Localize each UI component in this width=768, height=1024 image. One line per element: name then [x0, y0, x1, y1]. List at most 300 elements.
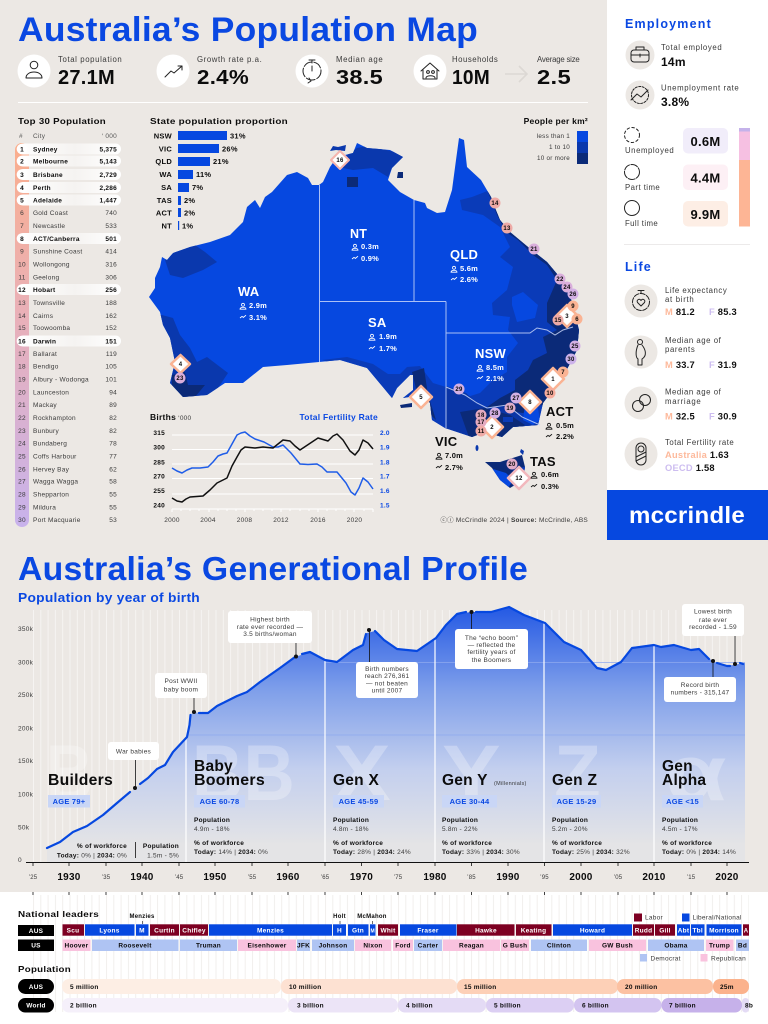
label: TAS: 0.3%: [541, 482, 559, 491]
label: NSW: NSW: [475, 346, 507, 361]
panel: national leaders: [18, 909, 749, 962]
city markers: 4: [179, 362, 183, 368]
panel: top 30 population table: 77: [109, 454, 117, 460]
panel: top 30 population table: Bendigo: [33, 364, 59, 370]
stat: life expectancy: at birth: [665, 295, 694, 304]
generation: Gen X: AGE 45-59: [339, 797, 378, 806]
bar chart: state population proportion: 2%: [184, 196, 195, 205]
callout: lowest birth rate: rate ever: [699, 617, 728, 624]
panel: top 30 population table: 17: [18, 351, 26, 358]
chart: population by year of birth: ’75: [394, 875, 403, 881]
panel: top 30 population table: 19: [18, 376, 26, 384]
line chart: births and total fertility rate: [150, 412, 390, 524]
callout: birth numbers: Birth numbers: [365, 666, 409, 673]
stat: median age of parents: parents: [665, 345, 695, 354]
stat: median age of marriage: M 32.5: [665, 412, 695, 422]
timeline: world population: 3 billion: [297, 1002, 324, 1010]
chart: population by year of birth: 1930: [57, 872, 81, 883]
generation: Gen Y: AGE 30-44: [450, 797, 490, 806]
row label: AUS: AUS: [29, 928, 44, 935]
panel: top 30 population table: ‘ 000: [102, 133, 117, 140]
panel: top 30 population table: 1,447: [99, 198, 117, 204]
city markers: 18: [477, 413, 485, 419]
panel: top 30 population table: 151: [105, 338, 117, 346]
timeline: US presidents: Obama: [664, 942, 688, 950]
panel: top 30 population table: ACT/Canberra: [33, 236, 80, 243]
chart: population by year of birth: ’65: [321, 875, 330, 881]
timeline: Australian prime ministers: Gill: [659, 928, 671, 934]
bar chart: state population proportion: TAS: [157, 196, 172, 205]
legend: Australian parties: Liberal/National: [692, 914, 742, 922]
panel: top 30 population table: 1: [20, 146, 24, 154]
stat: median age of parents: F 31.9: [709, 360, 737, 370]
timeline: world population: 8b: [745, 1002, 753, 1010]
timeline: Australian prime ministers: H: [337, 928, 342, 934]
timeline: Australian prime ministers: Lyons: [99, 928, 120, 934]
panel: top 30 population table: 89: [109, 402, 117, 409]
callout: war babies: [108, 742, 159, 790]
generation: Baby Boomers: [194, 758, 268, 856]
line chart: births and total fertility rate: 1.6: [380, 488, 390, 495]
callout: lowest birth rate: [682, 604, 744, 666]
panel: top 30 population table: 162: [105, 313, 117, 320]
timeline: world population: 7 billion: [669, 1002, 696, 1010]
axis labels: 100k: [18, 792, 34, 798]
line chart: births and total fertility rate: 2016: [310, 517, 326, 524]
city markers: 16: [336, 158, 344, 164]
stat: median age: Median age: [336, 55, 383, 64]
city markers: 30: [567, 357, 575, 363]
row label: AUS pill: [18, 979, 54, 994]
city markers: 25: [571, 344, 579, 350]
callout: record birth numbers: numbers - 315,147: [671, 690, 730, 696]
generation: Gen Z: Gen Z: [552, 772, 597, 789]
stat: median age of marriage: [624, 386, 737, 422]
panel: top 30 population table: Port Macquarie: [33, 517, 81, 524]
timeline: world population: [62, 998, 753, 1012]
bar chart: state population proportion: NT: [162, 222, 172, 230]
panel: top 30 population table: 55: [109, 492, 117, 498]
callout: war babies: War babies: [116, 748, 152, 756]
timeline: US presidents: Reagan: [459, 942, 484, 950]
callout: record birth numbers: Record birth: [681, 682, 719, 689]
panel: top 30 population table: Sydney: [33, 146, 58, 154]
title: Australia’s Population Map: [18, 11, 478, 49]
panel: top 30 population table: 14: [18, 313, 26, 320]
stat: total employed: Total employed: [661, 43, 722, 52]
chart: population by year of birth: ’85: [467, 875, 476, 881]
callout: highest birth rate: 3.5 births/woman: [243, 631, 297, 638]
panel: top 30 population table: 256: [105, 287, 117, 294]
panel: top 30 population table: Albury - Wodonga: [33, 376, 89, 384]
map: state borders: [320, 185, 573, 428]
panel: top 30 population table: 152: [105, 325, 117, 332]
panel: top 30 population table: Adelaide: [33, 198, 62, 204]
timeline: Australian population: 25m: [720, 984, 734, 991]
generation: Gen Z: Today: 25% | 2034: 32%: [552, 849, 630, 856]
stat: unemployment rate: [626, 80, 739, 110]
timeline: world population: 2 billion: [70, 1002, 97, 1010]
credit line: ⓒⓘ McCrindle 2024 | Source: McCrindle, ABS: [440, 516, 588, 524]
generation: Gen Y: % of workforce: [442, 840, 492, 847]
map: mainland: [149, 138, 579, 437]
heading: life: Life: [625, 260, 651, 274]
line chart: births and total fertility rate: 315: [153, 430, 165, 437]
chart: population by year of birth: 1950: [203, 872, 227, 883]
generation: Baby Boomers: Today: 14% | 2034: 0%: [194, 849, 268, 856]
stat: growth rate: Growth rate p.a.: [197, 55, 262, 64]
bar chart: state population proportion: 2%: [184, 208, 195, 218]
panel: top 30 population table: 12: [18, 287, 26, 294]
stat: life expectancy: M 81.2: [665, 307, 695, 317]
stat: median age of parents: M 33.7: [665, 360, 695, 370]
panel: top 30 population table: 55: [109, 504, 117, 512]
panel: top 30 population table: Wagga Wagga: [33, 478, 78, 486]
panel: top 30 population table: 105: [105, 364, 117, 370]
panel: top 30 population table: 27: [18, 478, 26, 486]
timeline: Australian prime ministers: M: [370, 928, 375, 934]
bar chart: state population proportion: VIC: [159, 144, 172, 154]
panel: top 30 population table: 15: [18, 325, 26, 332]
legend: Australian parties: Labor: [645, 914, 663, 922]
generation: Builders: AGE 79+: [53, 797, 86, 806]
panel: top 30 population table: 119: [106, 351, 117, 358]
panel: top 30 population table: 740: [105, 210, 117, 217]
timeline: Australian population: 20 million: [625, 984, 657, 991]
employment breakdown: 4.4M: [691, 170, 720, 186]
callout: echo boom: the Boomers: [472, 657, 512, 664]
heading: national leaders: National leaders: [18, 909, 99, 919]
panel: top 30 population table: 62: [109, 466, 117, 474]
panel: top 30 population table: 5,143: [99, 158, 117, 166]
axis labels: 50k: [18, 824, 30, 832]
panel: top 30 population table: 8: [20, 236, 24, 243]
panel: top 30 population table: 2,729: [99, 172, 117, 179]
stat: total fertility rate: Australia 1.63: [665, 450, 729, 460]
panel: national leaders: McMahon: [357, 914, 387, 920]
line chart: births and total fertility rate: 300: [153, 444, 165, 452]
background letters: α: [665, 728, 727, 817]
panel: top 30 population table: Melbourne: [33, 158, 68, 166]
logo panel: mccrindle: mccrindle: [629, 502, 745, 528]
panel: top 30 population table: 7: [20, 223, 24, 230]
generation: Gen Z: AGE 15-29: [557, 797, 596, 806]
stat: unemployment rate: 3.8%: [661, 95, 689, 109]
bar chart: state population proportion: SA: [161, 183, 172, 192]
generation: Gen Alpha: Today: 0% | 2034: 14%: [662, 849, 736, 856]
timeline: world population: 6 billion: [582, 1002, 609, 1010]
label: TAS: [530, 454, 559, 491]
panel: top 30 population table: 10: [18, 262, 26, 268]
panel: top 30 population table: 30: [18, 517, 26, 524]
bar chart: state population proportion: ACT: [156, 208, 172, 218]
bar chart: state population proportion: WA: [159, 170, 172, 179]
generation: Baby Boomers: 4.9m - 18%: [194, 826, 230, 833]
row label: AUS pill: AUS: [29, 984, 44, 991]
panel: life: [624, 260, 737, 473]
line chart: births and total fertility rate: 1.9: [380, 444, 390, 452]
callout: birth numbers: — not beaten: [366, 680, 408, 688]
timeline: US presidents: Clinton: [547, 942, 571, 950]
timeline: Australian population: 10 million: [289, 984, 321, 991]
city markers: 22: [556, 277, 564, 283]
timeline: US presidents: Truman: [196, 942, 221, 950]
panel: top 30 population table: Bundaberg: [33, 440, 67, 448]
city markers: 14: [491, 201, 499, 207]
stat: average size: Average size: [537, 55, 580, 64]
legend: US parties: [640, 954, 746, 962]
label: NT: [350, 227, 379, 263]
panel: top 30 population table: Gold Coast: [33, 210, 68, 217]
generation: Builders: 1.5m - 5%: [147, 852, 179, 860]
panel: top 30 population table: 101: [105, 376, 117, 384]
bar chart: state population proportion: 11%: [196, 170, 211, 179]
label: SA: 1.9m: [379, 332, 397, 341]
stat: average size: [537, 55, 580, 89]
generation: Baby Boomers: % of workforce: [194, 840, 244, 847]
generation: Builders: Population: [143, 843, 179, 850]
generation: Gen Alpha: Population: [662, 817, 698, 824]
city markers: 11: [478, 429, 485, 435]
panel: top 30 population table: #: [19, 133, 23, 140]
panel: headline stats: [18, 54, 580, 89]
timeline: US presidents: JFK: [297, 942, 310, 950]
city markers: 20: [508, 462, 516, 468]
stat: total fertility rate: Total Fertility rate: [665, 438, 734, 447]
panel: national leaders: Holt: [333, 914, 346, 920]
arrow: households to average size: [505, 66, 527, 82]
background letters: [46, 728, 727, 817]
generation: Gen Alpha: AGE <15: [666, 797, 699, 806]
generation: Builders: Today: 0% | 2034: 0%: [57, 852, 127, 860]
chart: population by year of birth: 1990: [496, 872, 520, 883]
timeline: Australian population: [62, 979, 749, 994]
timeline: Australian prime ministers: Abt: [678, 928, 690, 934]
chart: population by year of birth: ’55: [248, 875, 257, 881]
row label: US: [18, 940, 54, 951]
callout: post WWII baby boom: Post WWII: [165, 678, 197, 685]
generation: Gen Y: [442, 772, 527, 856]
stat: total population: Total population: [58, 55, 122, 64]
callout: echo boom: [455, 610, 528, 669]
chart: population by year of birth: 2000: [569, 872, 593, 883]
city markers: 28: [491, 411, 499, 417]
panel: top 30 population table: 94: [109, 390, 117, 396]
employment breakdown: 0.6M: [691, 134, 720, 149]
stat: average size: 2.5: [537, 67, 571, 89]
city markers: 15: [554, 318, 562, 324]
generation: Gen Alpha: Gen: [662, 758, 693, 775]
bar chart: state population proportion: NSW: [154, 132, 173, 140]
generation: Gen X: Today: 28% | 2034: 24%: [333, 849, 411, 856]
timeline: Australian population: 5 million: [70, 984, 99, 991]
callout: echo boom: The “echo boom”: [465, 635, 518, 642]
chart: population by year of birth: 2010: [642, 872, 666, 883]
timeline: US presidents: Bd: [738, 942, 747, 950]
city markers: 6: [575, 317, 579, 323]
timeline: Australian population: 15 million: [464, 984, 496, 991]
chart: population by year of birth: ’35: [102, 875, 111, 881]
label: SA: [368, 315, 397, 353]
stat: total employed: 14m: [661, 55, 686, 69]
chart: area under curve: [47, 607, 745, 862]
city markers: 13: [503, 226, 511, 232]
stat: median age of marriage: Median age of: [665, 388, 722, 396]
callout: record birth numbers: [664, 659, 736, 702]
panel: map of Australia: [149, 138, 620, 491]
heading: births: Births ‘000: [150, 412, 192, 422]
panel: top 30 population table: City: [33, 133, 46, 140]
chart: population by year of birth: ’05: [614, 875, 623, 881]
employment breakdown: 9.9M: [691, 207, 720, 222]
row label: World pill: [18, 998, 54, 1012]
generation: Gen X: % of workforce: [333, 840, 383, 847]
city markers: 17: [477, 420, 485, 426]
generation: Gen Z: 5.2m - 20%: [552, 826, 588, 833]
employment breakdown: Unemployed: [625, 146, 674, 155]
timeline: Australian prime ministers: Gtn: [352, 928, 364, 934]
background letters: B: [46, 728, 93, 817]
timeline: Australian prime ministers: Howard: [580, 928, 605, 934]
panel: top 30 population table: 16: [18, 338, 26, 346]
label: ACT: ACT: [546, 404, 573, 419]
line chart: births and total fertility rate: 2004: [200, 517, 216, 524]
legend: US parties: Democrat: [650, 956, 681, 962]
legend: people per km2: 10 or more: [537, 155, 570, 162]
background letters: Y: [442, 728, 501, 817]
stat: total fertility rate: OECD 1.58: [665, 463, 715, 473]
timeline: Australian prime ministers: Tbl: [692, 928, 703, 934]
panel: top 30 population table: Townsville: [33, 300, 65, 307]
city markers: 3: [565, 314, 569, 320]
panel: top 30 population table: 21: [18, 402, 26, 409]
generation: Baby Boomers: Baby: [194, 758, 233, 775]
timeline: Australian prime ministers: Fraser: [417, 928, 439, 934]
panel: top 30 population table: 28: [18, 492, 26, 498]
axis labels: 150k: [18, 758, 34, 765]
stat: life expectancy: [624, 284, 737, 318]
stat: life expectancy: F 85.3: [709, 307, 737, 317]
city markers: 10: [546, 391, 554, 397]
heading: employment: Employment: [625, 17, 712, 31]
bar chart: state population proportion: 31%: [230, 132, 246, 140]
label: NSW: 2.1%: [486, 374, 504, 383]
city markers: 5: [419, 395, 423, 401]
bar chart: state population proportion: [150, 116, 288, 230]
timeline: Australian prime ministers: Whit: [380, 928, 396, 934]
panel: top 30 population table: 533: [105, 223, 117, 230]
timeline: US presidents: Johnson: [319, 942, 347, 950]
generation: Gen Alpha: 4.5m - 17%: [662, 826, 698, 833]
label: WA: WA: [238, 284, 260, 299]
panel: top 30 population table: 18: [18, 364, 26, 370]
line chart: births and total fertility rate: 285: [153, 460, 165, 466]
stat: total fertility rate: [624, 438, 734, 473]
generation: Gen Y: Gen Y: [442, 772, 488, 789]
label: VIC: 7.0m: [445, 451, 463, 460]
panel: top 30 population table: 82: [109, 415, 117, 422]
generation: Baby Boomers: Boomers: [194, 772, 265, 789]
timeline: world population: 4 billion: [406, 1002, 433, 1010]
background letters: Z: [554, 728, 601, 817]
chart: population by year of birth: ’95: [540, 875, 549, 881]
panel: top 30 population table: Bunbury: [33, 428, 59, 435]
city markers: 24: [563, 285, 571, 291]
panel: top 30 population table: Cairns: [33, 313, 54, 320]
timeline: US presidents: Hoover: [65, 942, 89, 950]
heading: state population proportion: State population proportion: [150, 116, 288, 126]
city markers: 26: [569, 292, 577, 298]
chart: population by year of birth: ’25: [29, 875, 38, 881]
panel: top 30 population table: 316: [105, 262, 117, 268]
timeline: Australian prime ministers: Keating: [521, 928, 546, 934]
employment breakdown: Part time: [625, 183, 660, 192]
callout: highest birth rate: Highest birth: [250, 616, 290, 624]
line chart: births and total fertility rate: 2.0: [380, 430, 390, 437]
generation: Baby Boomers: Population: [194, 817, 230, 824]
timeline: Australian prime ministers: Menzies: [257, 928, 284, 934]
generation: Gen Y: Population: [442, 817, 478, 824]
legend: people per km2: 1 to 10: [549, 144, 570, 151]
label: ACT: 0.5m: [556, 421, 574, 430]
label: VIC: [435, 434, 463, 472]
line chart: births and total fertility rate: 240: [153, 502, 165, 510]
timeline: Australian prime ministers: Curtin: [154, 928, 175, 934]
chart: population by year of birth: 2020: [715, 872, 739, 883]
panel: top 30 population table: 6: [20, 210, 24, 217]
label: NSW: 8.5m: [486, 363, 504, 372]
generation: Gen Alpha: Alpha: [662, 772, 706, 789]
stat: households: Households: [452, 55, 498, 64]
panel: top 30 population table: 501: [105, 236, 117, 243]
stat: unemployment rate: Unemployment rate: [661, 84, 739, 92]
label: TAS: TAS: [530, 454, 556, 469]
timeline: Australian prime ministers: Scu: [67, 928, 79, 934]
background letters: X: [333, 728, 391, 817]
generation: Gen X: Population: [333, 817, 369, 824]
panel: top 30 population table: 306: [105, 274, 117, 282]
timeline: Australian prime ministers: Rudd: [635, 928, 652, 934]
callout: post WWII baby boom: [155, 673, 207, 714]
callout: lowest birth rate: recorded - 1.59: [689, 624, 737, 631]
label: QLD: [450, 247, 478, 284]
bar chart: state population proportion: 21%: [213, 157, 229, 166]
timeline: US presidents: G Bush: [503, 942, 527, 950]
label: WA: 2.9m: [249, 301, 267, 310]
timeline: Australian prime ministers: Chifley: [182, 928, 206, 934]
city markers: 19: [506, 406, 514, 412]
axis labels: 200k: [18, 726, 34, 732]
callout: highest birth rate: rate ever recorded —: [237, 624, 303, 631]
generation: Builders: Builders: [48, 772, 113, 789]
chart: population by year of birth: 1960: [276, 872, 300, 883]
label: NT: NT: [350, 227, 367, 241]
bar chart: state population proportion: QLD: [155, 157, 172, 166]
city markers: 9: [571, 304, 575, 310]
panel: top 30 population table: Perth: [33, 185, 51, 192]
generation: Gen X: Gen X: [333, 772, 379, 789]
bar chart: state population proportion: 7%: [192, 183, 203, 192]
generation: Builders: [48, 772, 179, 860]
timeline: US presidents: GW Bush: [602, 942, 633, 950]
panel: top 30 population table: 9: [20, 248, 24, 256]
callout: echo boom: — reflected the: [468, 642, 516, 649]
curve line: [47, 607, 743, 848]
panel: top 30 population table: Brisbane: [33, 172, 63, 179]
chart: population by year of birth: 1980: [423, 872, 447, 883]
callout: echo boom: fertility years of: [467, 649, 516, 656]
heading: top 30: Top 30 Population: [18, 116, 106, 126]
